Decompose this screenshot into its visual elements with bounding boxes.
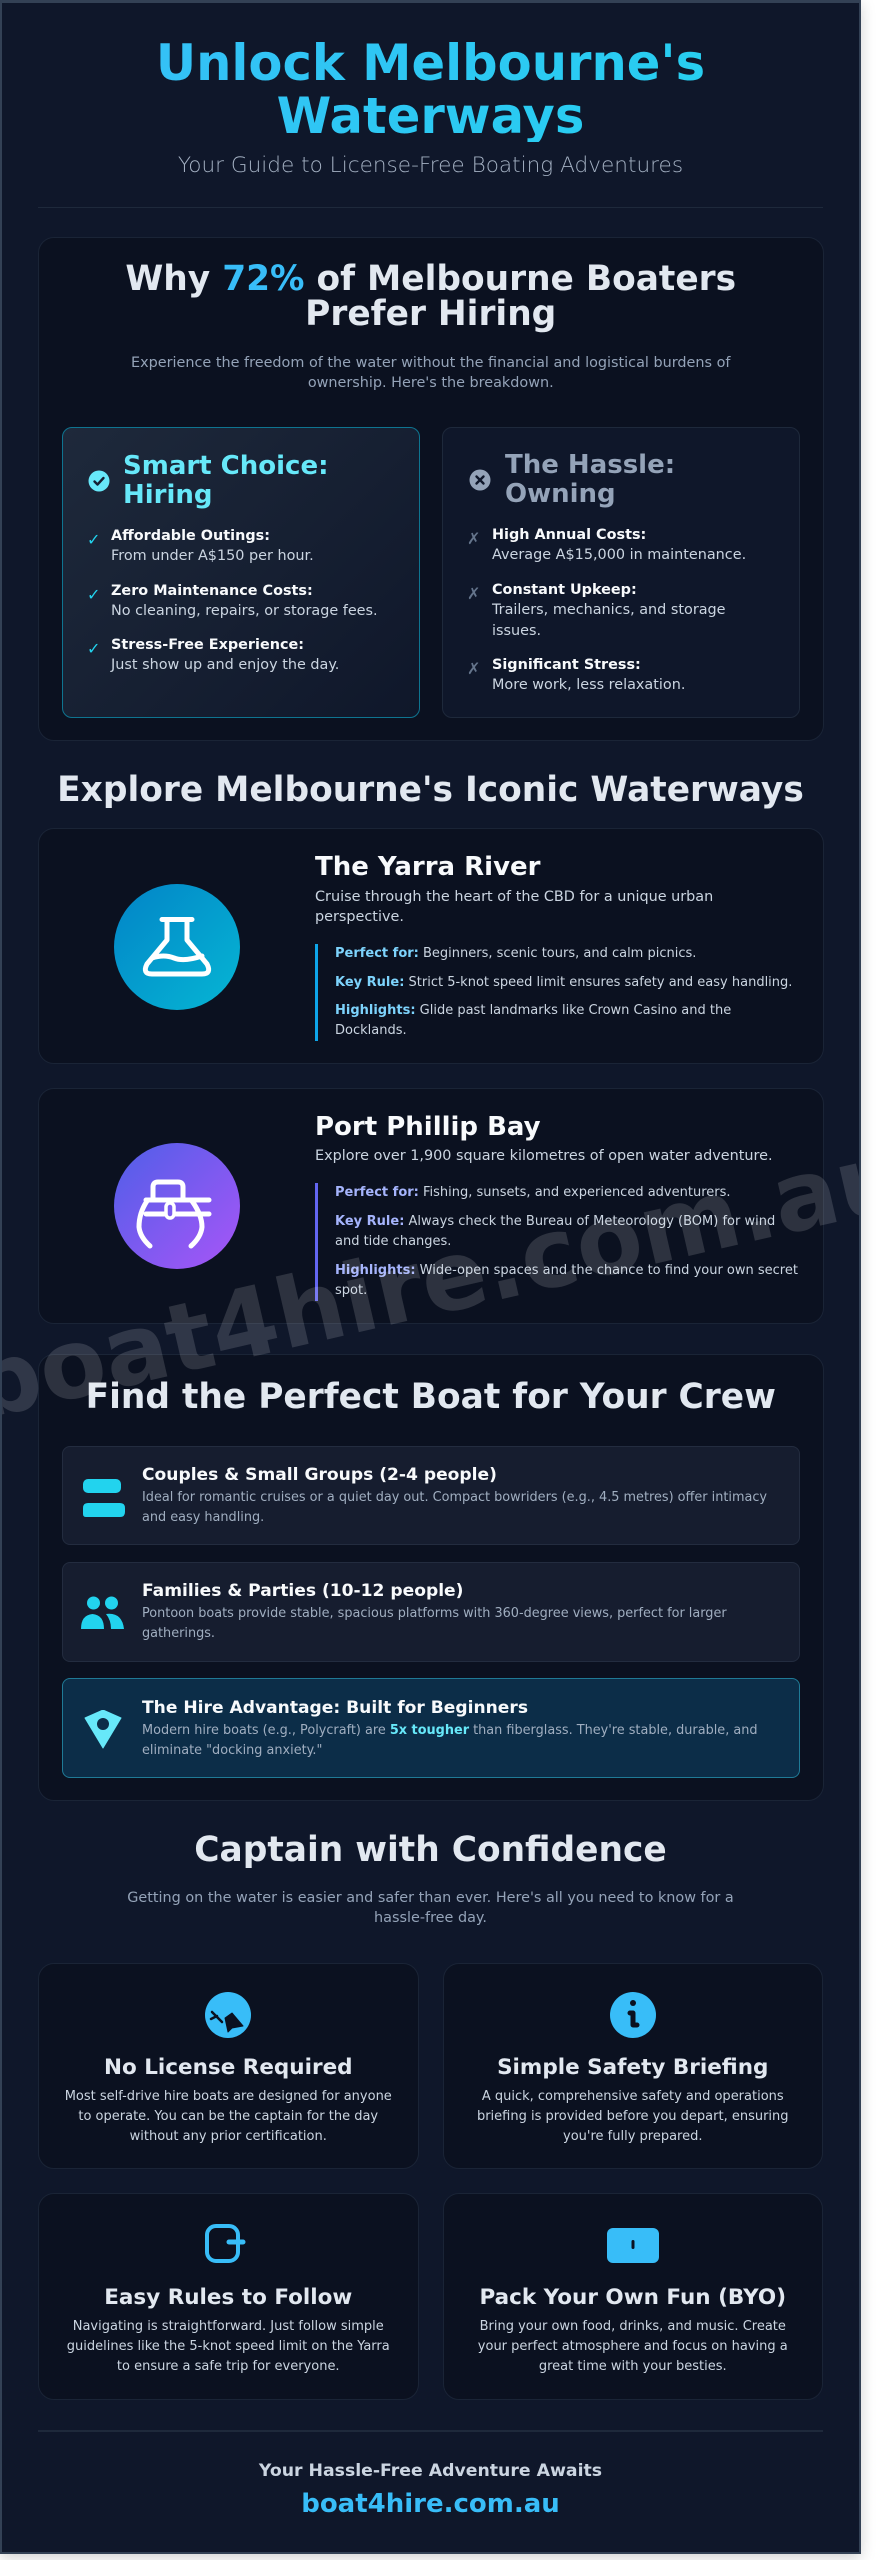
drawback: significant stress: Significant Stress:: [492, 657, 641, 673]
heading: the hassle: [505, 450, 675, 509]
description: Bring your own food, drinks, and music. Create: [480, 2319, 786, 2334]
intro text: Experience the freedom of the water without the financial and logistical burdens of: [131, 355, 730, 371]
drawback: high annual costs: [492, 527, 746, 563]
heading: captain with confidence: Captain with Confidence: [194, 1830, 667, 1870]
benefit: stress-free: [110, 637, 339, 673]
title: [0, 37, 861, 142]
card: hire advantage: [62, 1678, 800, 1778]
check mark: ✓: [87, 639, 100, 658]
description: [142, 1490, 767, 1525]
description: briefing is provided before you depart, ensuring: [477, 2109, 789, 2124]
header: [156, 34, 705, 178]
icon: no license: [205, 1992, 251, 2038]
panel: the hassle owning: [442, 427, 800, 718]
icon: rules: [205, 2224, 246, 2263]
highlights: Highlights: Glide past landmarks like Crown Casino and the: [335, 1003, 731, 1018]
intro text: Getting on the water is easier and safer than ever. Here's all you need to know for a: [127, 1890, 734, 1906]
check mark: ✓: [87, 530, 100, 549]
intro text: [131, 355, 731, 391]
icon: flask: [114, 884, 240, 1010]
panel: port phillip bay: [38, 1088, 824, 1324]
benefit: affordable outings: [111, 528, 314, 564]
description: gatherings.: [142, 1626, 215, 1641]
panel: find the perfect boat: [38, 1354, 824, 1801]
check mark: ✓: [87, 585, 100, 604]
x mark: ✗: [467, 659, 480, 678]
icon: x circle: [470, 470, 490, 490]
heading: yarra: The Yarra River: [315, 852, 540, 882]
heading: why 72%: [125, 259, 736, 334]
footer tagline: Your Hassle-Free Adventure Awaits: [259, 2461, 602, 2481]
title: Pack Your Own Fun (BYO): [479, 2285, 786, 2310]
benefit: zero maintenance: No cleaning, repairs, or storage fees.: [111, 603, 378, 619]
highlights: spot.: [335, 1283, 367, 1298]
intro text: ownership. Here's the breakdown.: [308, 375, 554, 391]
description: [478, 2319, 788, 2374]
description: Navigating is straightforward. Just follow simple: [73, 2319, 384, 2334]
description: Explore over 1,900 square kilometres of open water adventure.: [315, 1148, 773, 1164]
description: [142, 1606, 727, 1641]
key rule: Key Rule: Strict 5-knot speed limit ensures safety and easy handling.: [335, 975, 792, 990]
details list: [315, 944, 810, 1041]
benefit: affordable outings: Affordable Outings:: [111, 528, 270, 544]
heading: why 72%: Why 72% of Melbourne Boaters: [125, 259, 736, 299]
description: A quick, comprehensive safety and operations: [482, 2089, 784, 2104]
description: to ensure a safe trip for everyone.: [117, 2359, 340, 2374]
key rule: and tide changes.: [335, 1234, 451, 1249]
footer url: boat4hire.com.au: [301, 2489, 560, 2519]
key rule: Key Rule: Always check the Bureau of Meteorology (BOM) for wind: [335, 1214, 775, 1229]
description: and easy handling.: [142, 1510, 264, 1525]
highlights: [335, 1003, 731, 1038]
intro text: hassle-free day.: [374, 1910, 487, 1926]
drawback: high annual costs: High Annual Costs:: [492, 527, 646, 543]
perfect for: Perfect for: Beginners, scenic tours, and calm picnics.: [335, 946, 696, 961]
highlights: [335, 1263, 798, 1298]
heading: port phillip: Port Phillip Bay: [315, 1112, 541, 1142]
heading: find boat: Find the Perfect Boat for Your Crew: [86, 1376, 776, 1416]
title: Unlock Melbourne's: [156, 34, 705, 92]
drawback: high annual costs: Average A$15,000 in maintenance.: [492, 547, 746, 563]
title: Simple Safety Briefing: [497, 2055, 768, 2080]
details list: [315, 1183, 810, 1301]
icon: boat: [114, 1143, 240, 1269]
panel: smart choice hiring: [62, 427, 420, 718]
drawback: constant upkeep: issues.: [492, 623, 541, 639]
card: families: [62, 1562, 800, 1662]
description: you're fully prepared.: [563, 2129, 702, 2144]
benefit: zero maintenance: [111, 583, 378, 619]
heading: smart choice: [123, 451, 328, 510]
perfect for: Perfect for: Fishing, sunsets, and experienced adventurers.: [335, 1185, 731, 1200]
description: [65, 2089, 392, 2144]
icon: small boat: [83, 1479, 125, 1517]
description: [142, 1723, 758, 1758]
heading: smart choice: Smart Choice:: [123, 451, 328, 481]
title: Couples & Small Groups (2-4 people): [142, 1465, 497, 1485]
description: [67, 2319, 390, 2374]
heading: explore waterways: Explore Melbourne's Iconic Waterways: [57, 770, 804, 810]
description: your perfect atmosphere and focus on having a: [478, 2339, 788, 2354]
icon: info: [610, 1992, 656, 2038]
icon: cooler: [607, 2228, 659, 2263]
drawback: constant upkeep: [492, 582, 726, 639]
icon: shield pin: [84, 1710, 122, 1748]
panel: why hiring: [38, 237, 824, 741]
drawback: constant upkeep: Trailers, mechanics, and storage: [492, 602, 726, 618]
description: without any prior certification.: [130, 2129, 327, 2144]
title: Easy Rules to Follow: [104, 2285, 352, 2310]
card: couples: [62, 1446, 800, 1545]
description: [477, 2089, 789, 2144]
footer: [258, 2461, 602, 2519]
description: to operate. You can be the captain for the day: [78, 2109, 378, 2124]
description: [315, 889, 713, 925]
icon: check circle: [88, 470, 110, 492]
description: eliminate "docking anxiety.": [142, 1743, 322, 1758]
benefit: stress-free: Stress-Free Experience:: [111, 637, 304, 653]
heading: why 72%: Prefer Hiring: [305, 294, 556, 334]
drawback: constant upkeep: Constant Upkeep:: [492, 582, 637, 598]
card: pack your own fun: [442, 2193, 823, 2400]
title: No License Required: [104, 2055, 353, 2080]
description: perspective.: [315, 909, 404, 925]
x mark: ✗: [467, 584, 480, 603]
benefit: stress-free: Just show up and enjoy the day.: [111, 657, 339, 673]
card: easy rules: [38, 2193, 418, 2400]
heading: smart choice: Hiring: [123, 480, 213, 510]
key rule: [335, 1214, 775, 1249]
description: Ideal for romantic cruises or a quiet day out. Compact bowriders (e.g., 4.5 metres) offer intimacy: [142, 1490, 767, 1505]
card: no license: [38, 1963, 418, 2169]
x mark: ✗: [467, 529, 480, 548]
description: great time with your besties.: [539, 2359, 727, 2374]
description: Modern hire boats (e.g., Polycraft) are 5x tougher than fiberglass. They're stable, durable, and: [142, 1723, 758, 1738]
intro text: [127, 1890, 734, 1926]
heading: the hassle: The Hassle:: [505, 450, 675, 480]
description: guidelines like the 5-knot speed limit on the Yarra: [67, 2339, 390, 2354]
title: Families & Parties (10-12 people): [142, 1581, 463, 1601]
card: safety briefing: [442, 1963, 823, 2169]
benefit: affordable outings: From under A$150 per hour.: [111, 548, 314, 564]
drawback: significant stress: [492, 657, 685, 693]
title: The Hire Advantage: Built for Beginners: [142, 1698, 528, 1718]
title: Waterways: [277, 86, 584, 144]
icon: people: [81, 1596, 124, 1629]
description: Cruise through the heart of the CBD for a unique urban: [315, 889, 713, 905]
subtitle: Your Guide to License-Free Boating Adventures: [178, 153, 683, 178]
description: Most self-drive hire boats are designed for anyone: [65, 2089, 392, 2104]
description: Pontoon boats provide stable, spacious platforms with 360-degree views, perfect for larger: [142, 1606, 727, 1621]
panel: yarra river: [38, 828, 824, 1064]
highlights: Docklands.: [335, 1023, 407, 1038]
drawback: significant stress: More work, less relaxation.: [492, 677, 685, 693]
benefit: zero maintenance: Zero Maintenance Costs:: [111, 583, 313, 599]
highlights: Highlights: Wide-open spaces and the chance to find your own secret: [335, 1263, 798, 1278]
heading: the hassle: Owning: [505, 479, 616, 509]
